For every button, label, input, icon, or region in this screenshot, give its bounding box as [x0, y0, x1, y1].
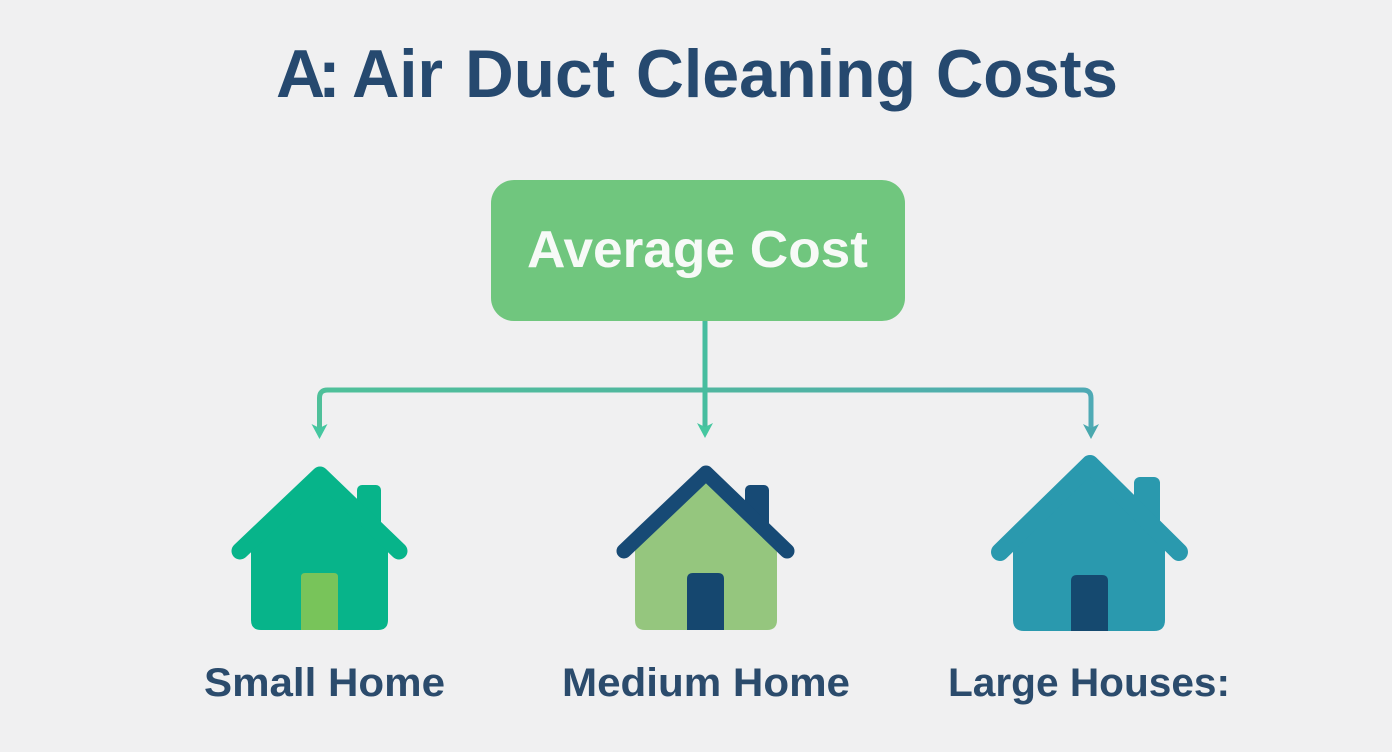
- label: small home: Small Home: [204, 661, 445, 705]
- title: [276, 36, 1118, 112]
- title: A: [276, 36, 325, 112]
- icon: medium home: [624, 473, 787, 630]
- door: [687, 573, 724, 630]
- flow arrows from average cost to homes: [312, 321, 1099, 439]
- horizontal branch with side drops: [320, 390, 1091, 428]
- arrowhead: left: [312, 424, 328, 439]
- label: medium home: Medium Home: [562, 661, 850, 705]
- panel: average cost box: [491, 180, 905, 321]
- title: Duct: [465, 36, 615, 112]
- door: [301, 573, 338, 630]
- icon: large home: [1000, 464, 1179, 631]
- title: Cleaning: [636, 36, 916, 112]
- label: large houses: Large Houses:: [948, 661, 1230, 705]
- title: :: [318, 36, 341, 112]
- average cost label: Average Cost: [527, 221, 868, 279]
- title: Air: [352, 36, 443, 112]
- door: [1071, 575, 1108, 631]
- title: Costs: [936, 36, 1118, 112]
- arrowhead: centre: [697, 423, 713, 438]
- arrowhead: right: [1083, 424, 1099, 439]
- icon: small home: [240, 475, 399, 630]
- centre stem: [702, 321, 708, 428]
